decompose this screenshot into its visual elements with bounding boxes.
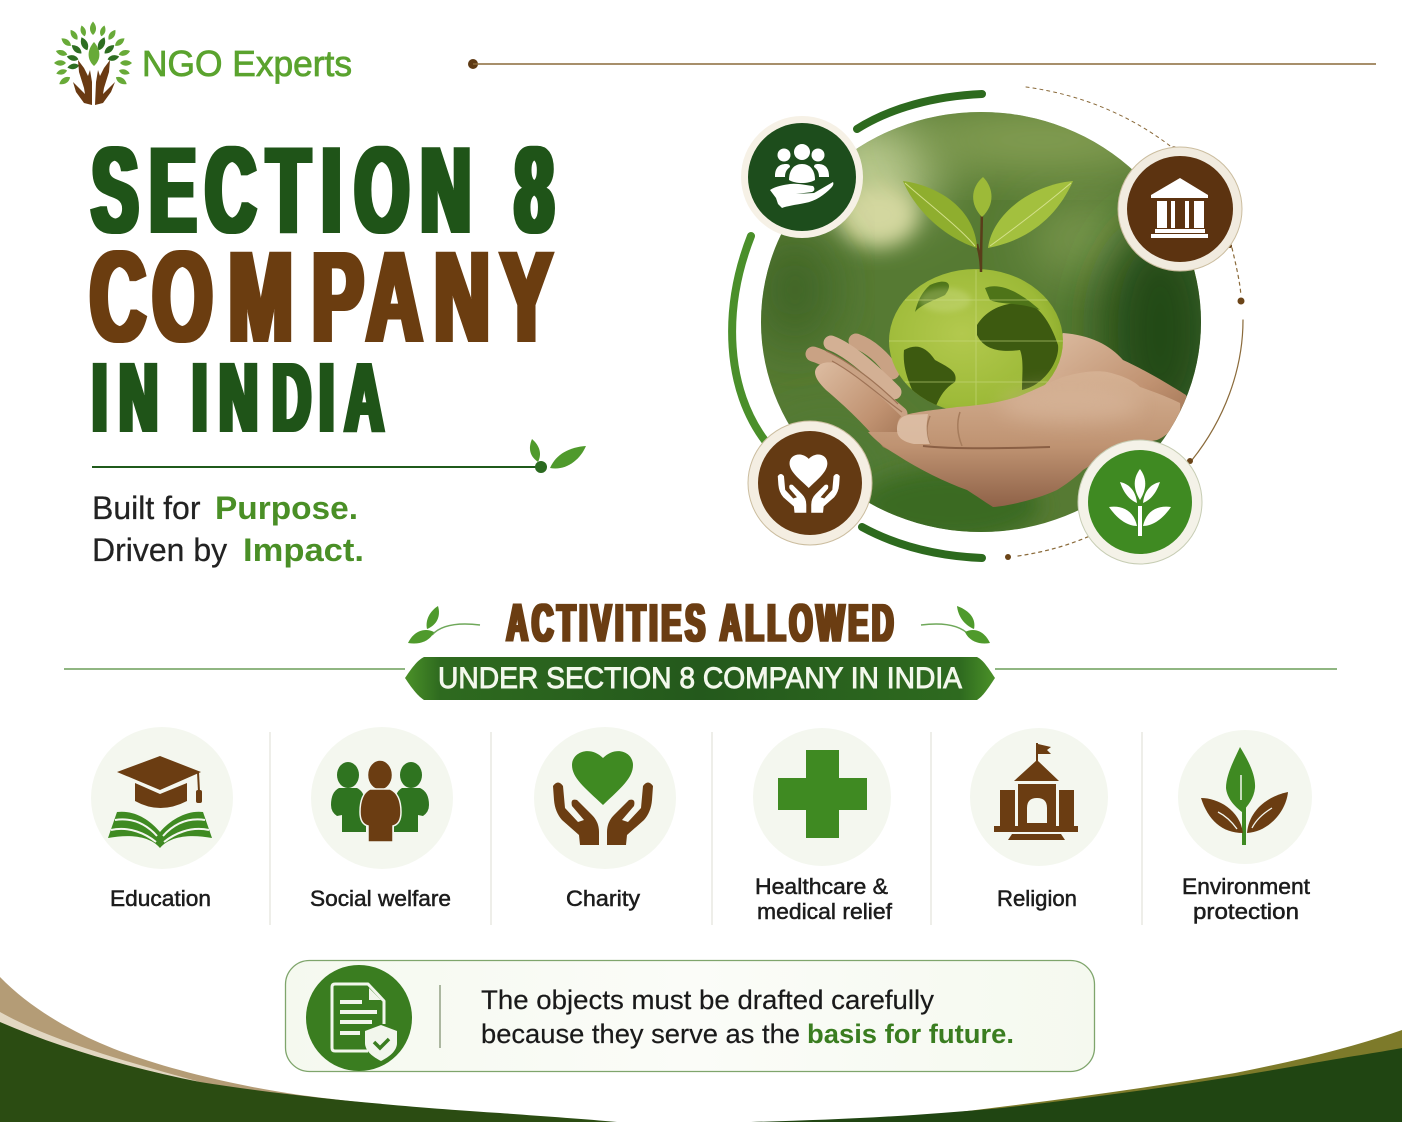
tagline line 1: Built for bbox=[92, 490, 201, 526]
icon: temple with flag bbox=[970, 728, 1108, 866]
decorative ring arcs bbox=[732, 87, 1243, 558]
label: Education bbox=[110, 886, 211, 911]
activity: Charity bbox=[534, 727, 676, 911]
footer wave bbox=[0, 977, 1402, 1122]
tagline line 2: Driven by bbox=[92, 532, 227, 568]
title line: COMPANY: COMPANY bbox=[90, 226, 552, 369]
label: protection bbox=[1193, 899, 1299, 924]
photo: sapling leaves bbox=[903, 177, 1073, 272]
label: Charity bbox=[566, 886, 640, 911]
divider lines beside banner bbox=[64, 668, 1337, 670]
heading: ACTIVITIES ALLOWED: ACTIVITIES ALLOWED bbox=[507, 594, 893, 653]
section heading bbox=[408, 594, 990, 653]
activity: Social welfare bbox=[310, 727, 453, 911]
callout text: The objects must be drafted carefully bbox=[481, 985, 935, 1015]
icon: heart in hands bbox=[534, 727, 676, 869]
icon: document with shield bbox=[306, 965, 412, 1071]
tagline line 2: Impact. bbox=[243, 532, 364, 568]
photo: front hand and thumb bbox=[868, 371, 1180, 507]
callout text: basis for future. bbox=[807, 1019, 1014, 1049]
icon: logo tree of leaves and hands bbox=[54, 22, 132, 105]
activity: Religion bbox=[970, 728, 1108, 911]
label: Environment bbox=[1182, 874, 1310, 899]
icon: sprout bbox=[1178, 730, 1312, 864]
icon: plant badge bbox=[1078, 440, 1202, 564]
icon: caring hands badge bbox=[748, 421, 872, 545]
ornament: right leaves bbox=[921, 606, 990, 644]
activity: Environment protection bbox=[1178, 730, 1312, 924]
label: Religion bbox=[997, 886, 1077, 911]
activity: Education bbox=[91, 727, 233, 911]
label: medical relief bbox=[757, 899, 893, 924]
icon: community care badge bbox=[741, 116, 863, 238]
label: Social welfare bbox=[310, 886, 451, 911]
icon: three people bbox=[311, 727, 453, 869]
photo: back hand and fingers bbox=[813, 333, 1190, 458]
icon: institution building badge bbox=[1118, 147, 1242, 271]
photo: glass globe bbox=[889, 269, 1063, 413]
callout: objects note bbox=[286, 960, 1094, 1072]
title divider with sprout bbox=[92, 439, 586, 473]
title line: IN INDIA: IN INDIA bbox=[92, 343, 384, 452]
title line: SECTION 8: SECTION 8 bbox=[92, 123, 553, 259]
ornament: left leaves bbox=[408, 606, 480, 644]
column separators bbox=[270, 732, 1142, 925]
vertical rule bbox=[439, 985, 441, 1048]
tagline line 1: Purpose. bbox=[215, 490, 358, 526]
hero: globe in hands illustration bbox=[732, 87, 1244, 564]
tagline bbox=[92, 490, 364, 568]
label: Healthcare & bbox=[755, 874, 888, 899]
callout text bbox=[481, 985, 1014, 1049]
photo: blurred green background bbox=[761, 112, 1201, 532]
activity: Healthcare and medical relief bbox=[753, 728, 893, 924]
icon: graduation cap and book bbox=[91, 727, 233, 869]
callout text: because they serve as the bbox=[481, 1019, 800, 1049]
logo: NGO Experts bbox=[54, 22, 352, 105]
icon: medical cross bbox=[753, 728, 891, 866]
banner: under section 8 company: UNDER SECTION 8 COMPANY IN INDIA bbox=[438, 662, 962, 695]
logo wordmark: NGO Experts bbox=[142, 43, 352, 84]
top rule with dot bbox=[468, 59, 1376, 69]
title block bbox=[90, 123, 553, 452]
